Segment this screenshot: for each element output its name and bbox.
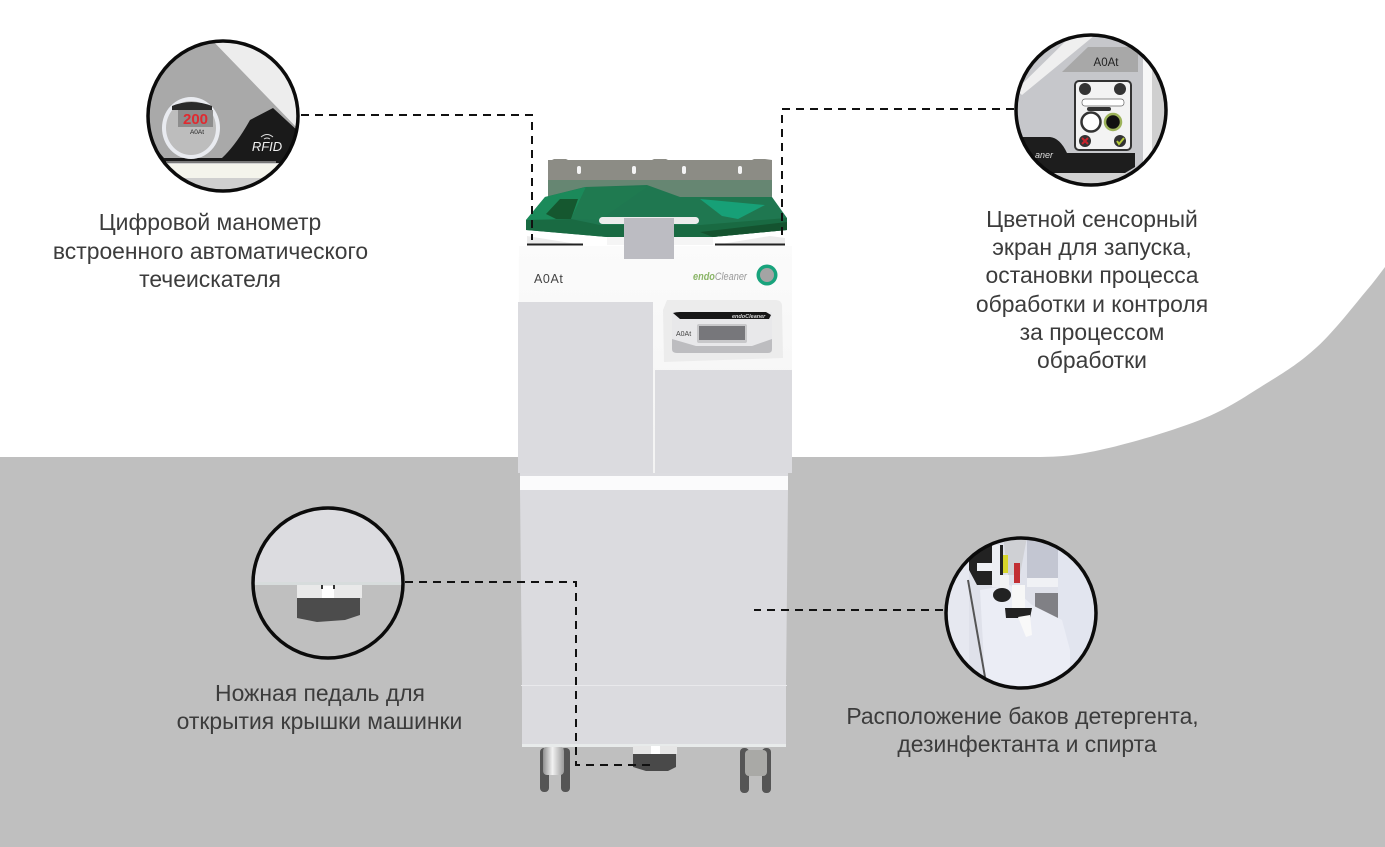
logo on panel: A0At [1094, 57, 1119, 69]
caption: обработки [1037, 347, 1147, 373]
caption: встроенного автоматического [53, 238, 368, 264]
caption: обработки и контроля [976, 291, 1208, 317]
detail circle: foot pedal [252, 507, 404, 659]
caption [846, 703, 1199, 757]
callout: digital manometer [53, 40, 532, 292]
RFID mark: RFID [252, 139, 282, 154]
caption [177, 680, 462, 734]
touch screen panel [1075, 81, 1131, 150]
power button [756, 264, 778, 286]
connector line [301, 115, 532, 240]
caption: открытия крышки машинки [177, 708, 462, 734]
caption: за процессом [1020, 319, 1164, 345]
machine: endoCleaner [518, 159, 792, 793]
pedal [633, 746, 677, 771]
machine lower cabinet [520, 473, 788, 747]
door left [518, 302, 653, 473]
connector line [782, 109, 1014, 236]
callout: foot pedal [177, 507, 655, 765]
connector line [405, 582, 655, 765]
caster right [740, 748, 771, 793]
callout: touch screen [782, 35, 1208, 373]
caption: Ножная педаль для [215, 680, 425, 706]
door right [655, 370, 792, 473]
panel label: aner [1035, 150, 1054, 160]
caption: экран для запуска, [992, 234, 1192, 260]
logo in dial: A0At [190, 129, 204, 136]
detail circle: manometer [147, 40, 299, 192]
connector line [754, 609, 943, 611]
control panel: endoCleaner [732, 314, 766, 320]
background: grey floor with curved shape [0, 267, 1385, 847]
logo: AOAt front: A0At [534, 272, 564, 286]
reading: 200 [183, 111, 208, 128]
detail circle: touch screen [1016, 35, 1166, 185]
caster left [540, 747, 570, 792]
caption: остановки процесса [986, 262, 1199, 288]
manometer dial [162, 97, 220, 159]
caption: течеискателя [139, 266, 281, 292]
caption: Расположение баков детергента, [846, 703, 1199, 729]
callout: detergent tanks [754, 537, 1199, 757]
caption: Цветной сенсорный [986, 206, 1198, 232]
machine upper body [518, 236, 792, 473]
detail circle: tanks [945, 537, 1097, 692]
machine lid: green cover [526, 185, 787, 259]
label: endoCleaner: endoCleaner [693, 271, 748, 283]
machine lid: back plate [548, 159, 772, 200]
caption: Цифровой манометр [99, 209, 321, 235]
caption: дезинфектанта и спирта [897, 731, 1157, 757]
caption [976, 206, 1208, 373]
control panel [663, 300, 783, 362]
control panel: A0At [676, 331, 691, 338]
caption [53, 209, 368, 292]
